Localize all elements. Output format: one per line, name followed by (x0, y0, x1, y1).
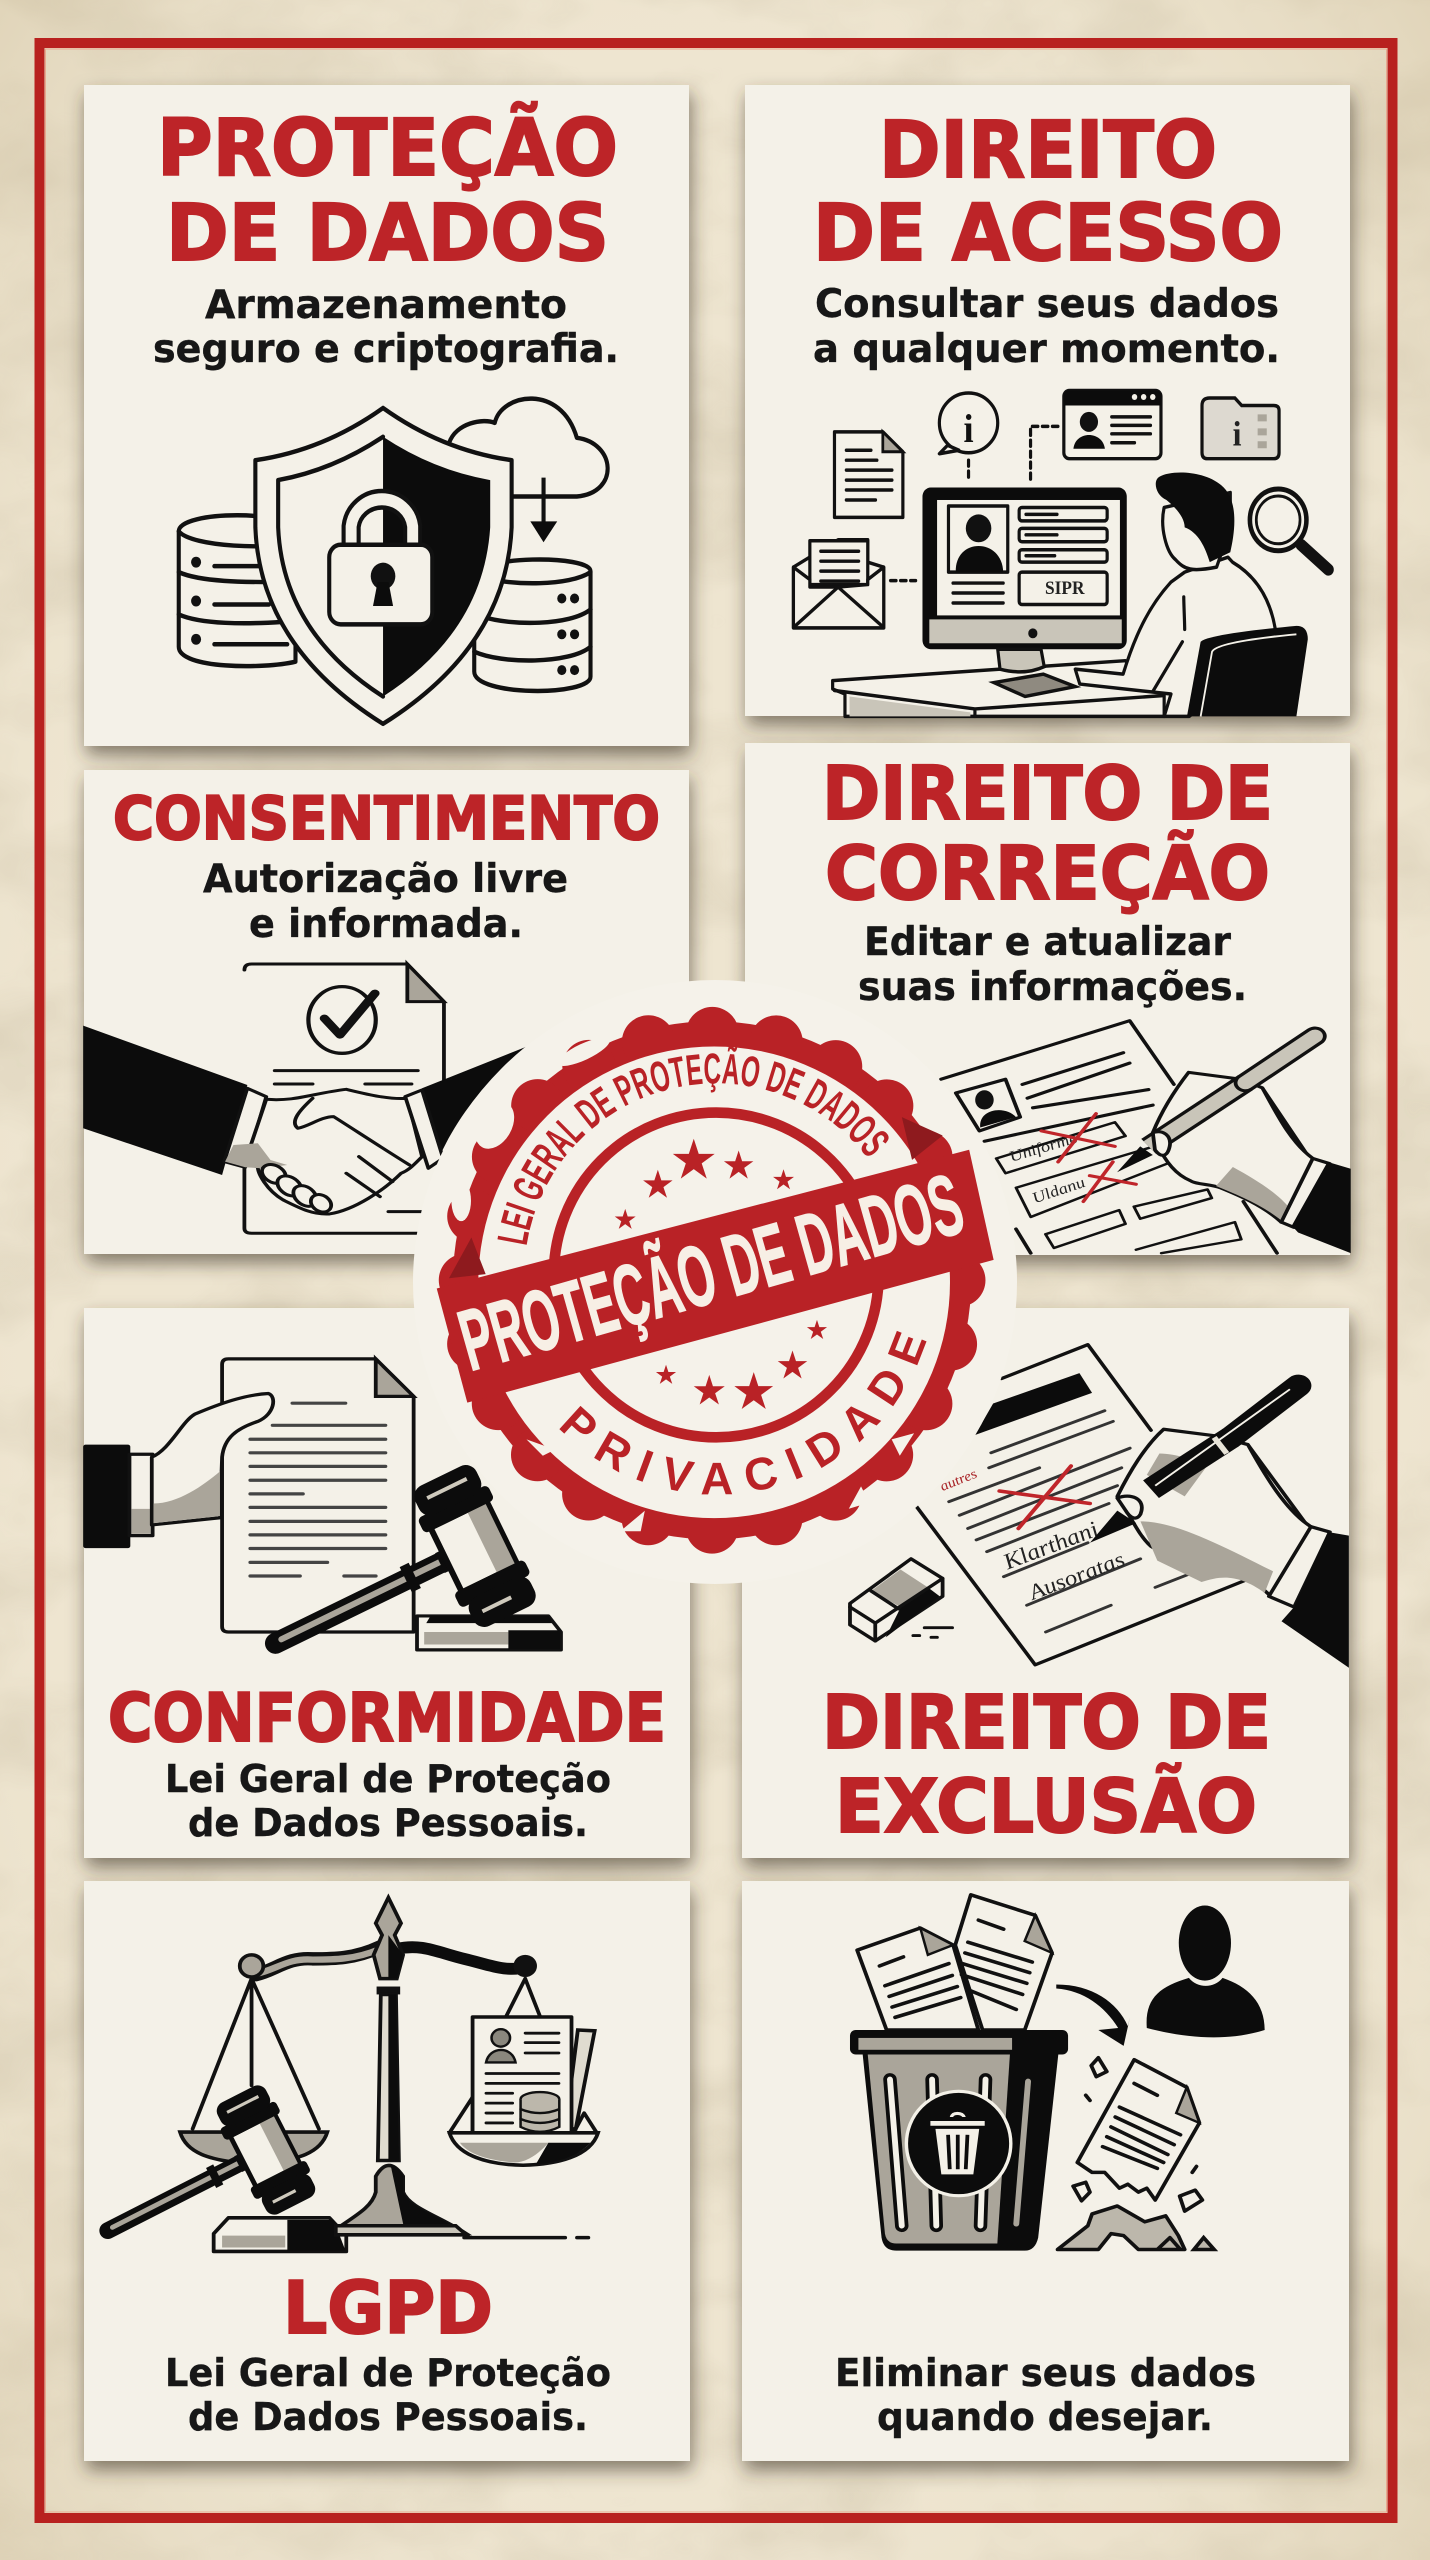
icon: hand signing a document and eraser (850, 1345, 1349, 1668)
description: autorização: e informada. (249, 902, 523, 947)
stamp arc text: Lei Geral de Proteção de Dados: LEI GERAL DE PROTEÇÃO DE DADOS (498, 1047, 889, 1245)
icon: person at computer with data icons (793, 391, 1328, 716)
heading: Direito de Correção: DIREITO DE (822, 751, 1273, 837)
description: editar (858, 920, 1247, 1010)
stamp inner ring (554, 1113, 879, 1437)
icon: shield, padlock, databases and cloud (179, 399, 608, 724)
description: lei geral: Lei Geral de Proteção (165, 1757, 611, 1801)
panel: Direito de Exclusão (742, 1308, 1349, 1858)
stamp ribbon banner (437, 1117, 994, 1403)
heading: Direito de Correção: CORREÇÃO (825, 829, 1270, 917)
card background (84, 770, 689, 1254)
card background (742, 1881, 1349, 2461)
icon: handshake over signed document (83, 964, 528, 1233)
heading: LGPD: LGPD (283, 2266, 493, 2350)
panel: Conformidade (83, 1308, 690, 1858)
stamp: Proteção de Dados, Privacidade (436, 1006, 994, 1554)
icon: hand signing a document and eraser: Klarthani (998, 1517, 1103, 1575)
icon: hand signing a document and eraser: autres (937, 1467, 980, 1494)
icon: hand, document and gavel (83, 1359, 561, 1713)
description: lei geral (165, 2351, 611, 2439)
heading: Direito de Acesso: DE ACESSO (813, 189, 1283, 279)
description: eliminar: quando desejar. (877, 2395, 1213, 2439)
description: editar: Editar e atualizar (864, 920, 1232, 965)
panel: Eliminar dados (742, 1881, 1349, 2461)
heading: Direito de Exclusão (822, 1680, 1271, 1850)
heading: Direito de Acesso: DIREITO (879, 106, 1217, 196)
stamp stars (615, 1139, 827, 1409)
card background (742, 1308, 1349, 1858)
description: lei geral: Lei Geral de Proteção (165, 2351, 611, 2395)
icon: hand correcting a form (941, 1021, 1351, 1253)
description: autorização: Autorização livre (203, 857, 568, 902)
panel: Direito de Correção (745, 743, 1351, 1255)
heading: Direito de Exclusão: EXCLUSÃO (835, 1762, 1257, 1850)
icon: trash bin, papers and person (850, 1895, 1265, 2251)
description: lei geral: de Dados Pessoais. (188, 2395, 588, 2439)
heading: Conformidade: CONFORMIDADE (108, 1679, 666, 1757)
description: eliminar: Eliminar seus dados (835, 2351, 1256, 2395)
description: armazenamento: seguro e criptografia. (153, 327, 619, 372)
card background (84, 1308, 690, 1858)
panel: Direito de Acesso (745, 85, 1350, 716)
card background (84, 85, 689, 746)
heading: Proteção de Dados: PROTEÇÃO (157, 102, 618, 194)
central white circle behind stamp (413, 980, 1017, 1584)
description: lei geral: de Dados Pessoais. (188, 1801, 588, 1845)
icon: scales of justice with gavel and data (79, 1898, 598, 2286)
card background (745, 743, 1350, 1255)
description: consultar dados (813, 282, 1280, 372)
heading: Proteção de Dados: DE DADOS (166, 189, 609, 279)
description: consultar dados: a qualquer momento. (813, 327, 1280, 372)
card background (84, 1881, 690, 2461)
icon: hand signing a document and eraser: Ausoratas (1022, 1548, 1129, 1606)
description: armazenamento (153, 283, 619, 372)
description: armazenamento: Armazenamento (205, 283, 567, 328)
icon: person at computer with data icons: i (963, 407, 974, 451)
stamp ribbon banner: PROTEÇÃO DE DADOS (449, 1155, 973, 1390)
icon: person at computer with data icons: i (1233, 415, 1242, 454)
heading: Direito de Exclusão: DIREITO DE (822, 1680, 1271, 1766)
description: consultar dados: Consultar seus dados (815, 282, 1279, 327)
stamp arc text: Privacidade: PRIVACIDADE (559, 1330, 926, 1494)
panel: LGPD (79, 1881, 690, 2461)
icon: person at computer with data icons: SIPR (1045, 577, 1085, 598)
stamp scalloped red disc (451, 1021, 971, 1539)
heading: Consentimento: CONSENTIMENTO (113, 784, 660, 854)
panel: Consentimento (83, 770, 689, 1254)
description: editar: suas informações. (858, 965, 1247, 1010)
panel: Proteção de Dados (84, 85, 689, 746)
card background (745, 85, 1350, 716)
description: eliminar (835, 2351, 1256, 2439)
heading: Direito de Acesso (813, 106, 1283, 279)
description: lei geral (165, 1757, 611, 1845)
heading: Proteção de Dados (157, 102, 618, 279)
description: autorização (203, 857, 568, 947)
heading: Direito de Correção (822, 751, 1273, 917)
icon: hand correcting a form: Uldanu (1029, 1174, 1088, 1207)
icon: hand correcting a form: Uniforme (1006, 1129, 1080, 1165)
